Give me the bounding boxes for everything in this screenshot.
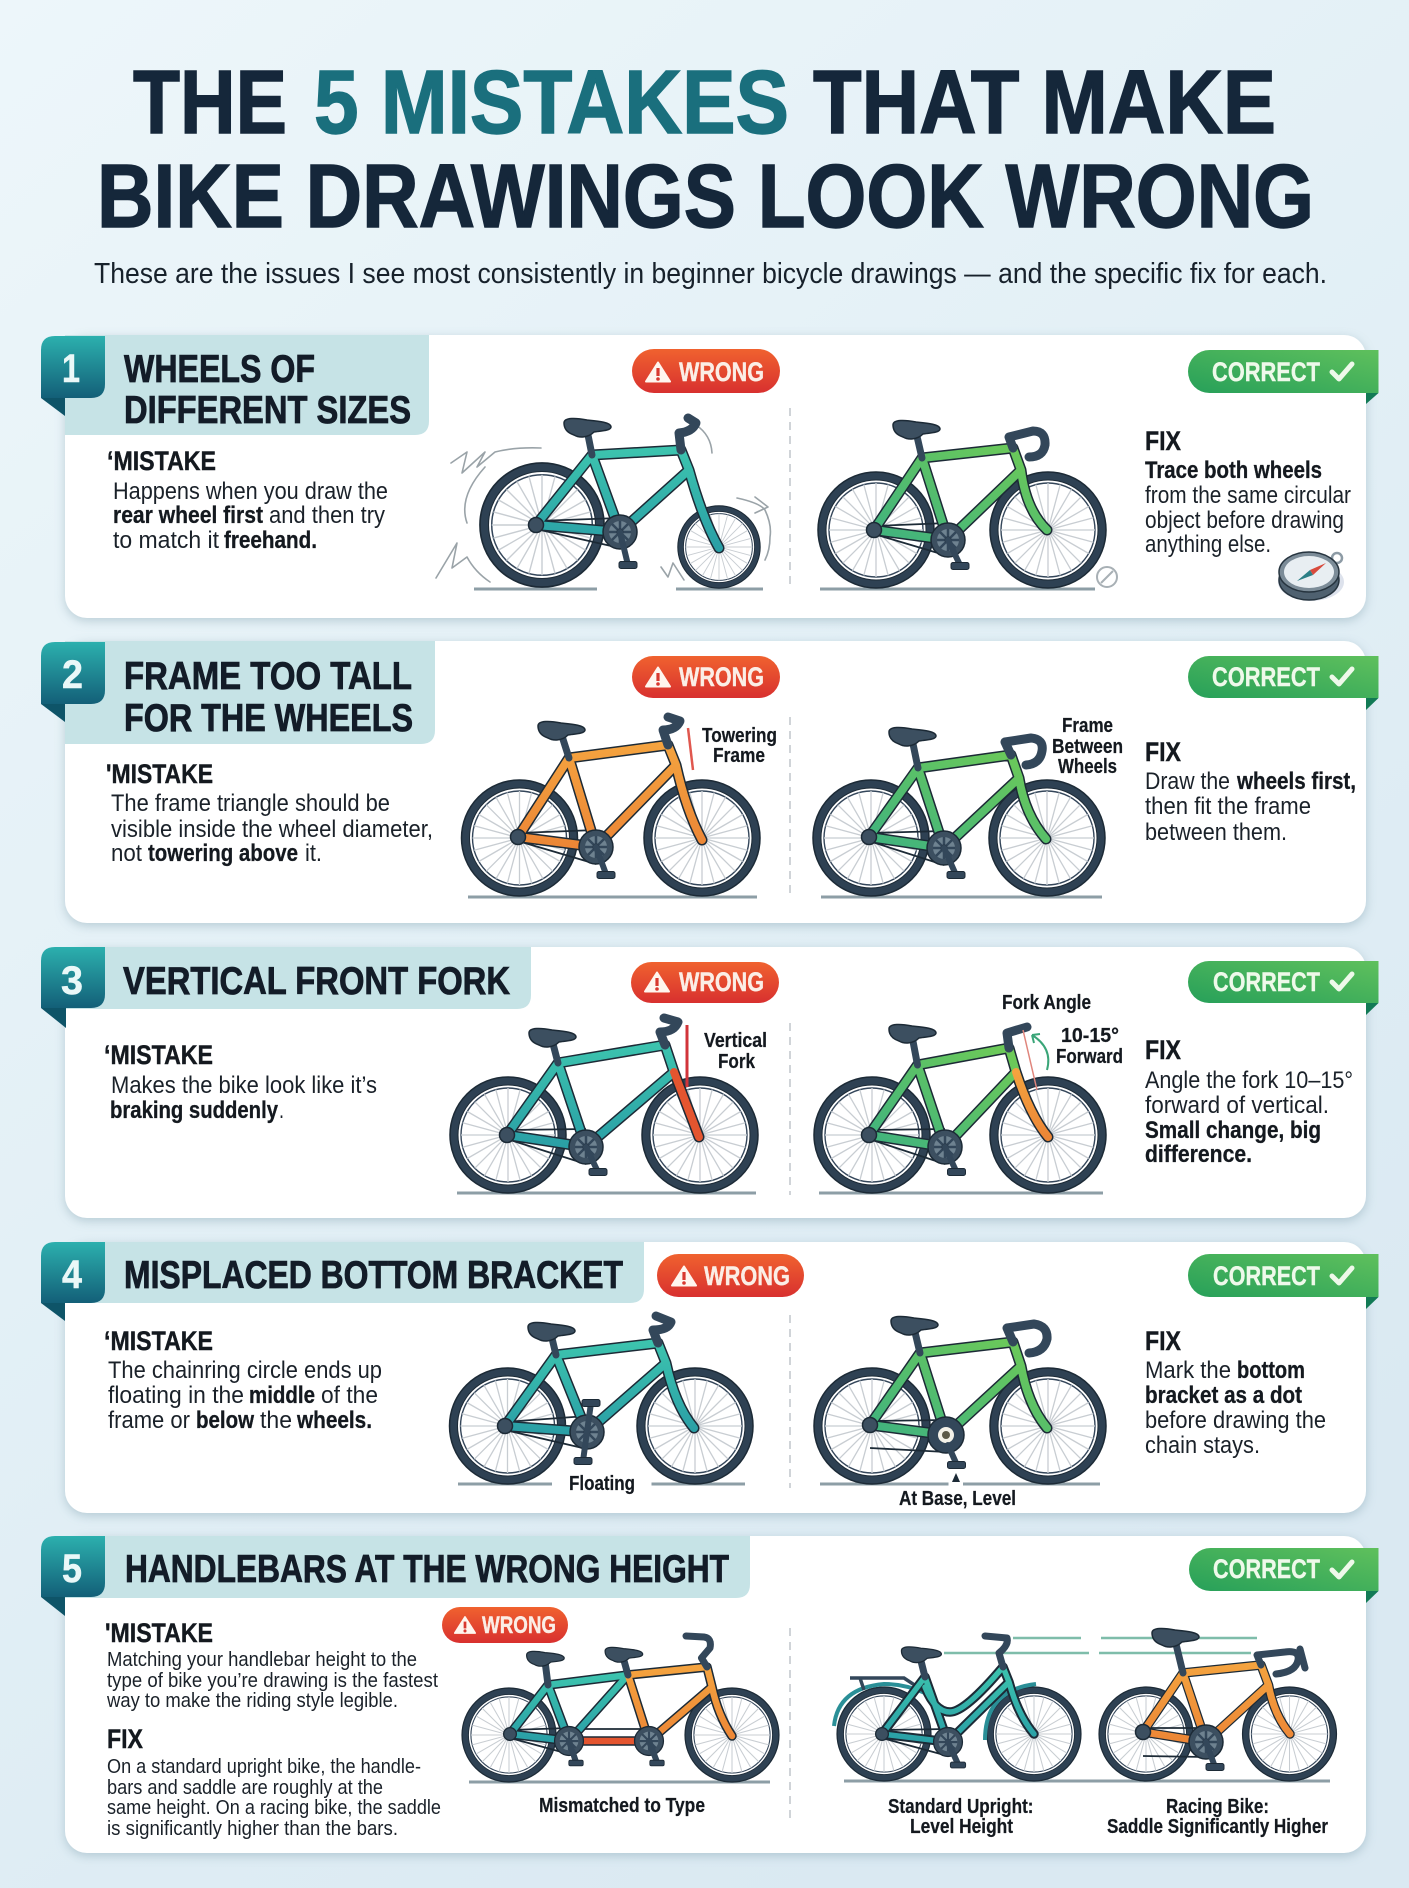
fix text 3: forward of vertical. [1145, 1092, 1329, 1119]
label: standard upright: Standard Upright: [888, 1795, 1034, 1818]
heading ribbon 5 [41, 1536, 750, 1616]
label: fork angle: Fork Angle [1002, 991, 1091, 1014]
fix text 1: FIX [1145, 426, 1181, 456]
mistake text 2: 'MISTAKE [106, 759, 213, 789]
mistake text 2: towering above [148, 840, 298, 867]
vertical guide [686, 1025, 688, 1087]
correct badge 1 [1188, 350, 1378, 404]
marker arrow [952, 1473, 960, 1482]
fix text 1: Trace both wheels [1145, 457, 1322, 484]
fix text 4: bottom [1237, 1357, 1305, 1384]
height guide lines [944, 1638, 1257, 1653]
heading ribbon 2: FOR THE WHEELS [124, 697, 413, 740]
mistake text 3: braking suddenly [110, 1097, 279, 1124]
mistake text 4: below [196, 1407, 254, 1434]
wrong badge 4 [657, 1254, 804, 1297]
mistake text 4: frame or [108, 1407, 190, 1434]
mistake text 4: floating in the [108, 1382, 244, 1409]
heading ribbon 1: DIFFERENT SIZES [124, 389, 411, 432]
curved arrow [1032, 1034, 1048, 1070]
heading ribbon 3: VERTICAL FRONT FORK [123, 960, 510, 1003]
bike: vertical fork [450, 1018, 758, 1193]
label: fork angle: Forward [1056, 1045, 1123, 1068]
correct badge 5 [1189, 1548, 1378, 1603]
divider 3 [789, 1023, 791, 1195]
correct badge 5: CORRECT [1213, 1554, 1320, 1584]
fix text 3: Angle the fork 10–15° [1145, 1067, 1353, 1094]
title: 5 MISTAKES [314, 53, 789, 153]
mistake text 1: rear wheel first [113, 502, 263, 529]
mistake text 3: . [279, 1097, 284, 1124]
mistake text 1: freehand. [224, 527, 317, 554]
mistake text 4 [104, 1326, 382, 1434]
divider 2 [789, 717, 791, 897]
correct badge 2: CORRECT [1212, 662, 1320, 692]
heading ribbon 3: 3 [61, 959, 83, 1003]
heading ribbon 1 [41, 335, 429, 435]
label: at base level: At Base, Level [899, 1487, 1016, 1510]
panel: mistake 4 misplaced bottom bracket [41, 1242, 1378, 1513]
correct badge 2 [1188, 656, 1378, 710]
heading ribbon 1: WHEELS OF [124, 348, 315, 391]
correct badge 4: CORRECT [1213, 1261, 1320, 1291]
ground line [844, 1780, 1330, 1782]
fix text 2: FIX [1145, 737, 1181, 767]
wrong badge 3 [631, 962, 779, 1003]
fix text 4 [1145, 1326, 1326, 1459]
label: frame between wheels [1052, 714, 1123, 778]
wrong badge 2 [632, 656, 780, 698]
bike: floating bracket [450, 1316, 753, 1484]
label: racing bike: Racing Bike: [1166, 1795, 1269, 1818]
bike: tall orange frame [462, 717, 760, 897]
fix text 2 [1145, 737, 1356, 846]
heading ribbon 3 [41, 947, 531, 1028]
wrong badge 1: WRONG [679, 357, 764, 387]
mistake and fix text 5: FIX [107, 1724, 143, 1754]
panel: mistake 3 vertical front fork [41, 947, 1378, 1218]
title: THAT MAKE [813, 53, 1276, 153]
fix text 2: wheels first, [1236, 768, 1356, 795]
bike: mismatched tandem [462, 1636, 779, 1782]
mistake text 3: ‘MISTAKE [104, 1040, 213, 1070]
wrong badge 3: WRONG [679, 967, 764, 997]
label: vertical fork [704, 1029, 767, 1073]
mistake text 3 [104, 1040, 377, 1124]
label: floating: Floating [569, 1472, 635, 1495]
label: frame between wheels: Wheels [1058, 755, 1117, 778]
mistake and fix text 5: same height. On a racing bike, the saddle [107, 1796, 441, 1819]
icon: compass [1278, 552, 1344, 601]
mistake text 4: middle [249, 1382, 315, 1409]
heading ribbon 2 [41, 641, 435, 744]
label: vertical fork: Vertical [704, 1029, 767, 1052]
heading ribbon 4: 4 [62, 1253, 83, 1297]
heading ribbon 2: FRAME TOO TALL [124, 655, 412, 698]
red fork [674, 1072, 699, 1137]
mistake text 2 [106, 759, 433, 867]
mistake text 2: it. [305, 840, 322, 867]
heading ribbon 2: 2 [62, 653, 83, 697]
correct badge 4 [1188, 1254, 1378, 1309]
fix text 4: bracket as a dot [1145, 1382, 1302, 1409]
wrong badge 5 [442, 1607, 568, 1643]
divider 5 [789, 1628, 791, 1822]
mistake text 2: not [111, 840, 142, 867]
correct badge 3: CORRECT [1213, 967, 1320, 997]
red lower tube [569, 1738, 649, 1744]
fix text 1 [1145, 426, 1351, 558]
mistake and fix text 5: type of bike you’re drawing is the fastest [107, 1669, 438, 1692]
wrong badge 1 [632, 349, 780, 393]
mistake text 1: Happens when you draw the [113, 478, 388, 505]
label: frame between wheels: Frame [1062, 714, 1113, 737]
heading ribbon 1: 1 [62, 347, 80, 391]
mistake text 1: to match it [113, 527, 219, 554]
label: towering frame [702, 724, 777, 767]
label: towering frame: Towering [702, 724, 777, 747]
wrong badge 4: WRONG [704, 1261, 790, 1291]
bike: angled fork [814, 1024, 1106, 1193]
fix text 3: difference. [1145, 1141, 1252, 1168]
panel: mistake 5 handlebars at wrong height [41, 1536, 1378, 1853]
fix text 3: FIX [1145, 1035, 1181, 1065]
heading ribbon 4 [41, 1242, 644, 1321]
mistake text 3: Makes the bike look like it’s [111, 1072, 377, 1099]
mistake and fix text 5: Matching your handlebar height to the [107, 1648, 417, 1671]
orange fork [1016, 1072, 1048, 1137]
label: fork angle: 10-15° [1061, 1024, 1119, 1047]
bike: bracket at base [814, 1316, 1106, 1484]
fix text 2: between them. [1145, 819, 1287, 846]
fix text 3: Small change, big [1145, 1117, 1321, 1144]
label: fork angle [1002, 991, 1123, 1068]
panel: mistake 2 frame too tall [41, 641, 1378, 923]
fix text 1: object before drawing [1145, 507, 1344, 534]
label: frame between wheels: Between [1052, 735, 1123, 758]
wrong badge 5: WRONG [482, 1612, 556, 1639]
heading ribbon 5: HANDLEBARS AT THE WRONG HEIGHT [125, 1548, 729, 1591]
heading ribbon 4: MISPLACED BOTTOM BRACKET [124, 1254, 623, 1297]
mistake text 4: The chainring circle ends up [108, 1357, 382, 1384]
divider 1 [789, 408, 791, 590]
fix text 4: before drawing the [1145, 1407, 1326, 1434]
mistake and fix text 5: bars and saddle are roughly at the [107, 1776, 383, 1799]
bike: racing [1099, 1628, 1336, 1781]
fix text 4: Mark the [1145, 1357, 1231, 1384]
label: racing bike [1107, 1795, 1328, 1838]
label: standard upright [888, 1795, 1034, 1838]
mistake and fix text 5: is significantly higher than the bars. [107, 1817, 398, 1840]
correct badge 3 [1188, 961, 1378, 1015]
fix text 1: anything else. [1145, 531, 1271, 558]
bike: correct green frame [813, 727, 1105, 897]
label: towering frame: Frame [713, 744, 765, 767]
label: standard upright: Level Height [910, 1815, 1013, 1838]
mistake and fix text 5: 'MISTAKE [105, 1618, 213, 1648]
fix text 4: chain stays. [1145, 1432, 1260, 1459]
mistake text 1: ‘MISTAKE [107, 446, 216, 476]
mistake text 1: and then try [269, 502, 385, 529]
panel: mistake 1 wheels of different sizes [41, 335, 1378, 618]
mistake text 4: the [260, 1407, 292, 1434]
divider 4 [789, 1315, 791, 1488]
label: vertical fork: Fork [718, 1050, 755, 1073]
fix text 2: Draw the [1145, 768, 1230, 795]
label: mismatched to type: Mismatched to Type [539, 1794, 705, 1817]
mistake text 4: of the [321, 1382, 378, 1409]
heading ribbon 5: 5 [62, 1547, 82, 1591]
mistake and fix text 5: On a standard upright bike, the handle- [107, 1755, 421, 1778]
correct badge 1: CORRECT [1212, 357, 1320, 387]
towering arrow [688, 728, 693, 770]
bike: correct equal wheels [818, 420, 1117, 589]
mistake text 4: ‘MISTAKE [104, 1326, 213, 1356]
mistake text 2: The frame triangle should be [111, 790, 390, 817]
fix text 1: from the same circular [1145, 482, 1351, 509]
mistake and fix text 5 [105, 1618, 441, 1840]
title [97, 53, 1314, 247]
title: THE [133, 53, 287, 153]
wrong badge 2: WRONG [679, 662, 764, 692]
mistake text 2: visible inside the wheel diameter, [111, 816, 433, 843]
angle guide [1023, 1030, 1037, 1090]
bike: standard upright [834, 1636, 1081, 1781]
fix text 3 [1145, 1035, 1353, 1168]
bike: mismatched wheels [436, 418, 770, 589]
mistake text 1 [107, 446, 388, 554]
subtitle: These are the issues I see most consistently in beginner bicycle drawings — and the specific fix for each. [94, 258, 1327, 290]
fix text 4: FIX [1145, 1326, 1181, 1356]
label: racing bike: Saddle Significantly Higher [1107, 1815, 1328, 1838]
mistake and fix text 5: way to make the riding style legible. [106, 1689, 398, 1712]
mistake text 4: wheels. [296, 1407, 372, 1434]
fix text 2: then fit the frame [1145, 793, 1311, 820]
fenders and rack [834, 1684, 1036, 1740]
